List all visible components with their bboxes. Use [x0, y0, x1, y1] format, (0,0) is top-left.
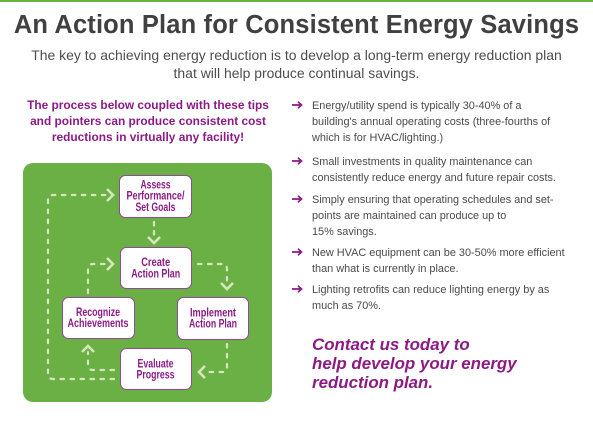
- bullet text 5: much as 70%.: [312, 300, 381, 312]
- left intro callout: reductions in virtually any facility!: [52, 130, 244, 144]
- contact callout: [312, 335, 518, 392]
- bullet text 4: than what is currently in place.: [312, 263, 458, 275]
- box: recognize: [62, 298, 134, 338]
- bullet text 2: consistently reduce energy and future repair costs.: [312, 172, 556, 184]
- bullet text 1: building's annual operating costs (three-fourths of: [312, 116, 550, 128]
- box: assess: Set Goals: [136, 202, 176, 214]
- bullet text 1: [312, 100, 550, 144]
- box: create: Create: [141, 257, 170, 269]
- box: evaluate: Evaluate: [138, 358, 174, 370]
- box: evaluate: Progress: [136, 370, 174, 382]
- left intro callout: The process below coupled with these tips: [27, 98, 269, 112]
- bullet text 3: Simply ensuring that operating schedules and set-: [312, 194, 554, 206]
- bullet text 5: [312, 284, 549, 312]
- title: An Action Plan for Consistent Energy Savings: [14, 11, 579, 39]
- icon: bullet arrow 1: [292, 101, 303, 109]
- bullet text 4: [312, 247, 565, 275]
- bullet text 4: New HVAC equipment can be 30-50% more efficient: [312, 247, 565, 259]
- contact callout: Contact us today to: [312, 335, 470, 354]
- box: assess: [120, 176, 192, 218]
- box: implement: Action Plan: [189, 318, 237, 330]
- box: assess: Performance/: [126, 190, 185, 202]
- arrow: recognize to create: [88, 258, 113, 293]
- arrow: evaluate to recognize: [82, 346, 114, 370]
- box: implement: Implement: [190, 308, 236, 320]
- contact callout: reduction plan.: [312, 373, 433, 392]
- box: recognize: Recognize: [76, 307, 120, 319]
- bullet text 3: points are maintained can produce up to: [312, 210, 506, 222]
- bullet text 5: Lighting retrofits can reduce lighting energy by as: [312, 284, 549, 296]
- panel: green background: [23, 163, 272, 402]
- box: create: Action Plan: [131, 268, 180, 280]
- intro text: The key to achieving energy reduction is to develop a long-term energy reduction plan: [31, 47, 562, 63]
- arrow: implement to evaluate: [199, 344, 227, 378]
- contact callout: help develop your energy: [312, 354, 517, 373]
- icon: bullet arrow 5: [292, 285, 303, 293]
- box: recognize: Achievements: [68, 318, 128, 330]
- bullet text 3: [312, 194, 554, 238]
- bullet text 1: Energy/utility spend is typically 30-40% of a: [312, 100, 521, 112]
- box: assess: Assess: [140, 180, 170, 192]
- arrow: assess to create: [148, 222, 160, 243]
- bullet text 3: 15% savings.: [312, 226, 377, 238]
- icon: bullet arrow 3: [292, 195, 303, 203]
- top green rule: [0, 0, 593, 2]
- icon: bullet arrow 2: [292, 157, 303, 165]
- box: implement: [178, 298, 248, 340]
- left intro callout: and pointers can produce consistent cost: [30, 114, 266, 128]
- arrow: evaluate back to assess: [48, 189, 114, 379]
- arrow: create to implement: [198, 264, 233, 289]
- icon: bullet arrow 4: [292, 248, 303, 256]
- bullet text 2: Small investments in quality maintenance can: [312, 156, 532, 168]
- bullet text 2: [312, 156, 556, 184]
- box: create: [120, 248, 192, 288]
- box: evaluate: [120, 348, 192, 390]
- left intro callout: [27, 98, 269, 144]
- intro text: that will help produce continual savings.: [174, 65, 419, 81]
- intro text: [31, 47, 562, 81]
- bullet text 1: which is for HVAC/lighting.): [312, 132, 443, 144]
